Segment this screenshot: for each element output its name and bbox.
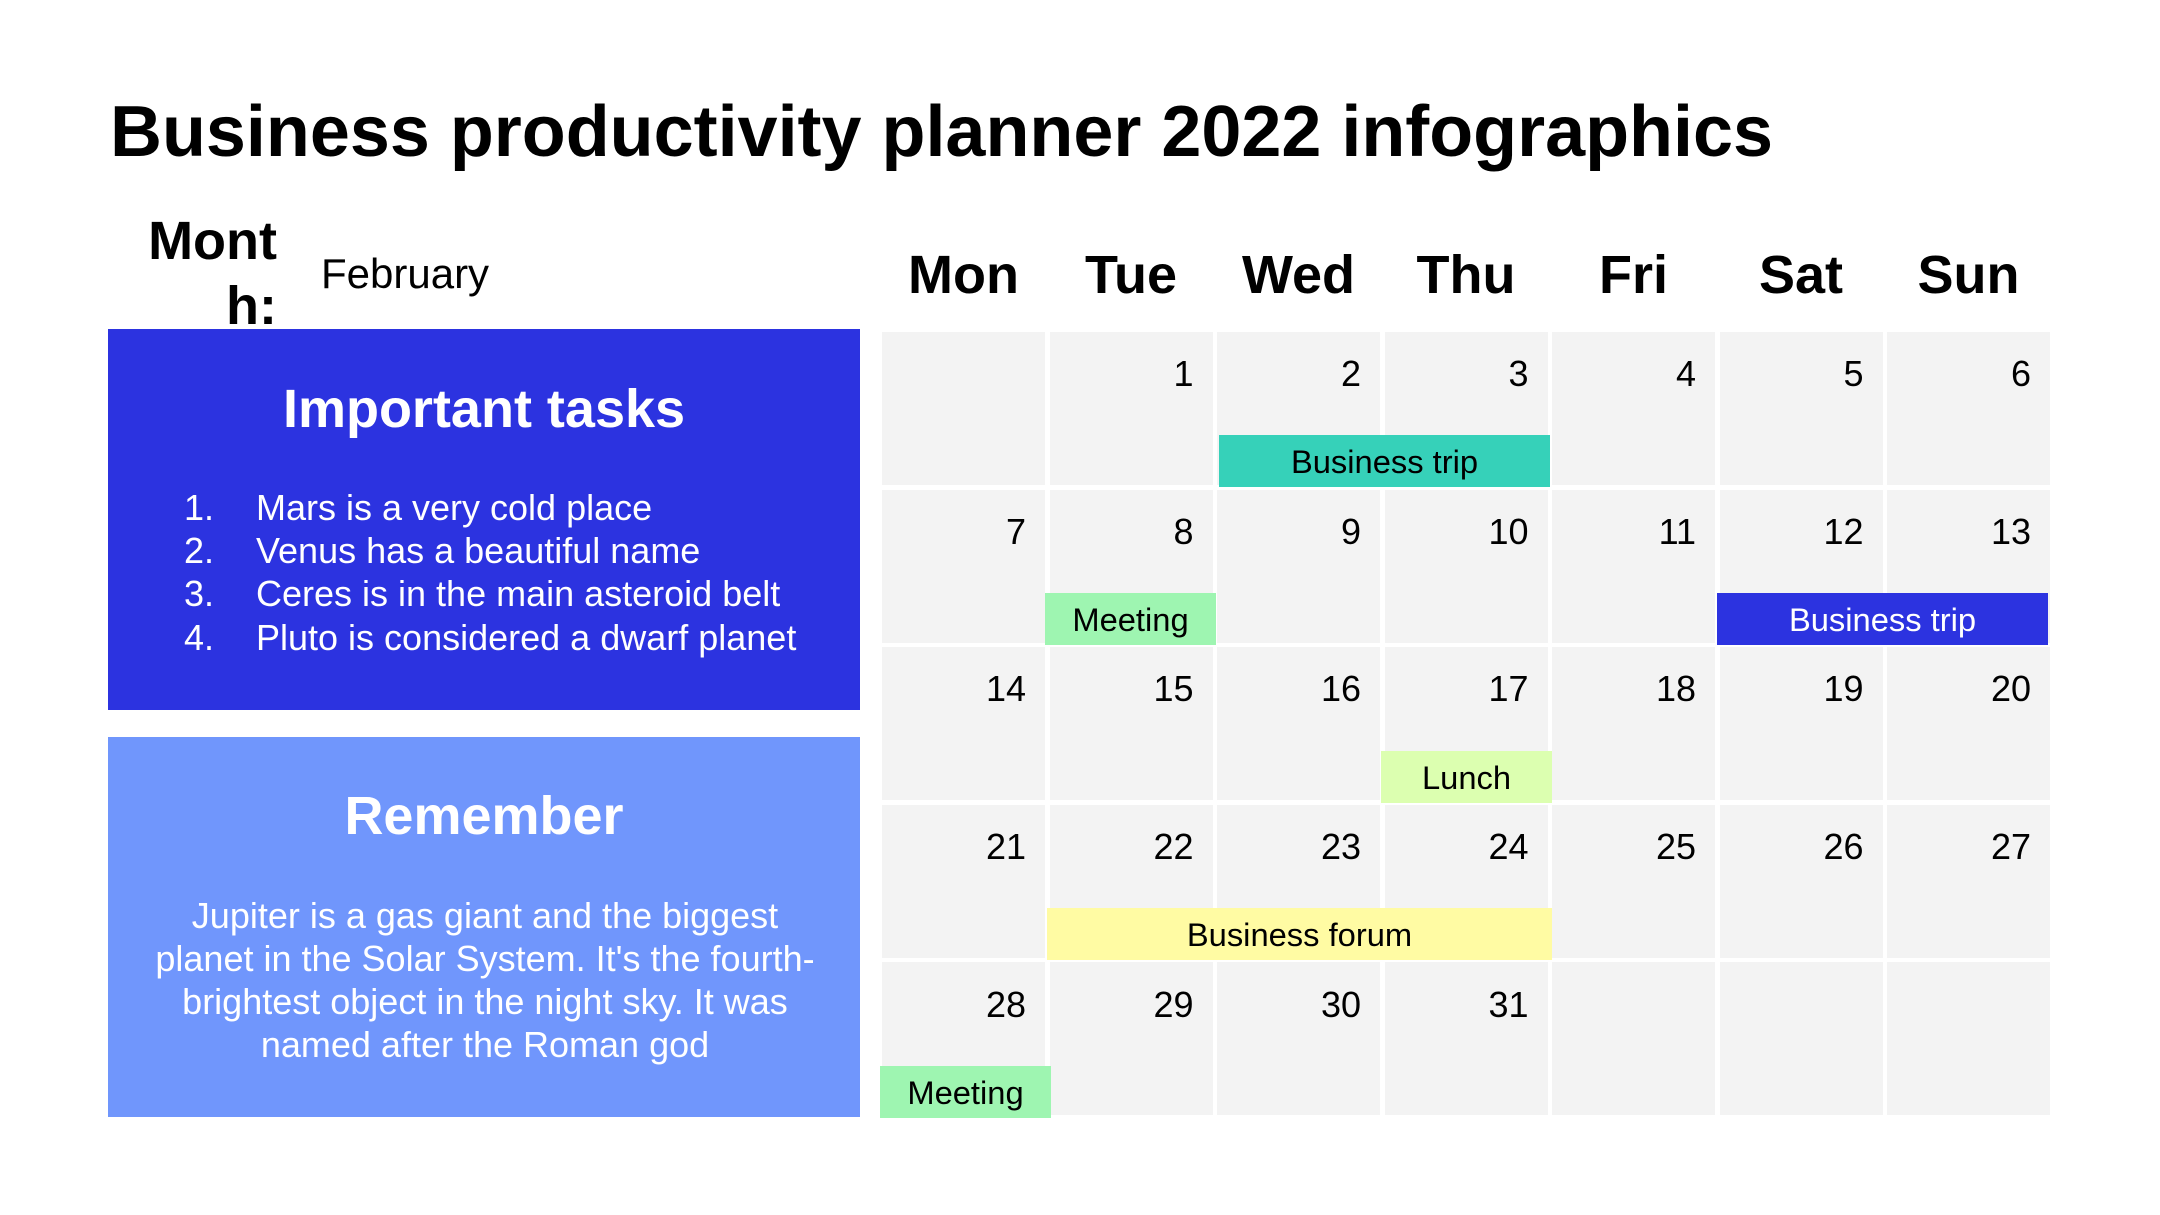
date 16: 16	[1321, 668, 1361, 709]
date 10	[1384, 490, 1548, 643]
date 14: 14	[986, 668, 1026, 709]
event: business trip, teal: Business trip	[1291, 443, 1478, 480]
date 12: 12	[1823, 511, 1864, 552]
date 15	[1050, 647, 1212, 800]
date 24	[1384, 805, 1548, 958]
date 19: 19	[1823, 668, 1864, 709]
month label: Month:	[148, 211, 277, 336]
weekday header: Sun: Sun	[1918, 245, 2020, 305]
date 7	[882, 490, 1045, 643]
weekday header: Tue: Tue	[1085, 245, 1177, 305]
month value: February	[321, 250, 489, 297]
date 30	[1217, 962, 1380, 1115]
empty cell	[1720, 962, 1882, 1115]
task 1: 1.	[184, 487, 214, 528]
date 14	[882, 647, 1045, 800]
event: business forum: Business forum	[1187, 916, 1412, 953]
date 7: 7	[1006, 511, 1026, 552]
remember body text: brightest object in the night sky. It was	[182, 981, 788, 1022]
event: lunch	[1381, 751, 1552, 803]
date 23: 23	[1321, 826, 1361, 867]
remember body text: named after the Roman god	[261, 1024, 709, 1065]
date 11	[1552, 490, 1715, 643]
empty cell	[1552, 962, 1715, 1115]
event: meeting, row 2: Meeting	[1072, 601, 1189, 638]
date 29: 29	[1153, 984, 1194, 1025]
heading: important tasks: Important tasks	[283, 379, 685, 439]
date 24: 24	[1488, 826, 1528, 867]
panel: important tasks	[108, 329, 860, 710]
event: business forum	[1047, 908, 1552, 960]
date 5: 5	[1843, 353, 1864, 394]
date 21	[882, 805, 1045, 958]
event: business trip, blue: Business trip	[1789, 601, 1976, 638]
weekday header: Wed: Wed	[1242, 245, 1355, 305]
date 2: 2	[1341, 353, 1361, 394]
date 28: 28	[986, 984, 1026, 1025]
date 16	[1217, 647, 1380, 800]
event: business trip, blue	[1717, 593, 2048, 645]
date 12	[1720, 490, 1882, 643]
task 2: 2.	[184, 530, 214, 571]
event: meeting, row 5: Meeting	[907, 1074, 1024, 1111]
date 11: 11	[1659, 511, 1696, 552]
date 18	[1552, 647, 1715, 800]
remember body text: Jupiter is a gas giant and the biggest	[192, 895, 778, 936]
date 31: 31	[1488, 984, 1528, 1025]
date 25: 25	[1656, 826, 1696, 867]
date 4: 4	[1676, 353, 1696, 394]
title: Business productivity planner 2022 infographics	[110, 92, 1773, 172]
calendar grid	[882, 332, 2050, 1115]
date 30: 30	[1321, 984, 1361, 1025]
date 26: 26	[1823, 826, 1864, 867]
date 29	[1050, 962, 1212, 1115]
date 27: 27	[1991, 826, 2031, 867]
date 22: 22	[1153, 826, 1194, 867]
task 4: Pluto is considered a dwarf planet	[256, 617, 796, 658]
date 8: 8	[1173, 511, 1194, 552]
date 27	[1887, 805, 2050, 958]
task list	[184, 487, 796, 658]
date 13: 13	[1991, 511, 2031, 552]
date 25	[1552, 805, 1715, 958]
date 1: 1	[1173, 353, 1194, 394]
date 8	[1050, 490, 1212, 643]
date 31	[1384, 962, 1548, 1115]
date 2	[1217, 332, 1380, 485]
date 15: 15	[1153, 668, 1194, 709]
date 20: 20	[1991, 668, 2031, 709]
date 23	[1217, 805, 1380, 958]
event: meeting, row 2	[1045, 593, 1216, 645]
empty cell	[1887, 962, 2050, 1115]
task 1: Mars is a very cold place	[256, 487, 652, 528]
date 21: 21	[986, 826, 1026, 867]
event: business trip, teal	[1219, 435, 1550, 487]
task 4: 4.	[184, 617, 214, 658]
date 28	[882, 962, 1045, 1115]
date 19	[1720, 647, 1882, 800]
date 9: 9	[1341, 511, 1361, 552]
date 17: 17	[1488, 668, 1528, 709]
date 26	[1720, 805, 1882, 958]
weekday header: Fri: Fri	[1599, 245, 1668, 305]
event: meeting, row 5	[880, 1066, 1051, 1118]
date 6	[1887, 332, 2050, 485]
date 20	[1887, 647, 2050, 800]
empty cell	[882, 332, 1045, 485]
date 5	[1720, 332, 1882, 485]
task 3: 3.	[184, 573, 214, 614]
date 3: 3	[1508, 353, 1528, 394]
date 13	[1887, 490, 2050, 643]
date 6: 6	[2011, 353, 2031, 394]
task 3: Ceres is in the main asteroid belt	[256, 573, 780, 614]
date 4	[1552, 332, 1715, 485]
remember body text: planet in the Solar System. It's the fourth-	[155, 938, 815, 979]
date 18: 18	[1656, 668, 1696, 709]
task 2: Venus has a beautiful name	[256, 530, 700, 571]
weekday header: Mon: Mon	[908, 245, 1019, 305]
weekday header: Sat: Sat	[1759, 245, 1843, 305]
heading: remember: Remember	[344, 786, 624, 846]
date 1	[1050, 332, 1212, 485]
remember body text	[155, 895, 815, 1065]
panel: remember	[108, 737, 860, 1117]
date 10: 10	[1488, 511, 1528, 552]
event: lunch: Lunch	[1422, 759, 1511, 796]
date 3	[1384, 332, 1548, 485]
date 17	[1384, 647, 1548, 800]
date 9	[1217, 490, 1380, 643]
date 22	[1050, 805, 1212, 958]
weekday header: Thu: Thu	[1417, 245, 1515, 305]
